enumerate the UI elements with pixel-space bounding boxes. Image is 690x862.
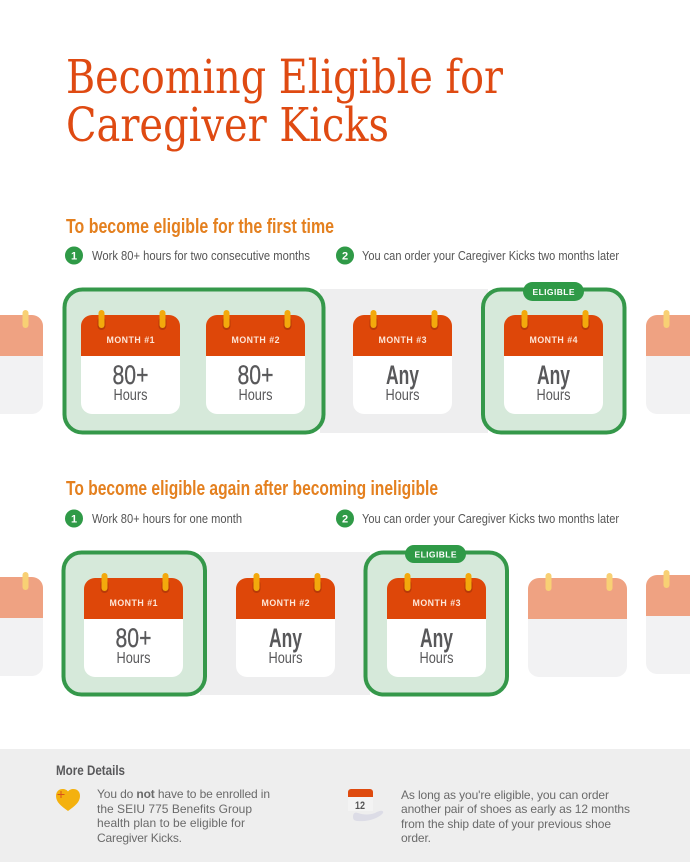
calendar: month 2 xyxy=(206,310,305,414)
step 2: again: 2 xyxy=(342,514,348,526)
calendar: month 2: MONTH #2 xyxy=(232,335,280,345)
calendar: month 2: Hours xyxy=(268,650,303,667)
step 1: again: Work 80+ hours for one month xyxy=(92,511,242,526)
note: reorder timing: another pair of shoes as early as 12 months xyxy=(401,802,630,816)
note: enrollment: You do not have to be enrolled in xyxy=(97,787,270,801)
calendar: month 4: Any xyxy=(537,360,570,390)
note: enrollment: health plan to be eligible for xyxy=(97,816,245,830)
calendar: month 2: Any xyxy=(269,623,302,653)
eligible box: month 4 xyxy=(483,290,624,432)
calendar: month 1: MONTH #1 xyxy=(106,335,155,345)
heading: first time: To become eligible for the first time xyxy=(66,216,334,238)
step 1: again xyxy=(65,510,242,528)
icon: calendar and shoe xyxy=(348,789,383,821)
note: reorder timing: from the ship date of your previous shoe xyxy=(401,817,611,831)
faded calendar left xyxy=(0,310,43,414)
step 2: first time xyxy=(336,246,620,264)
more details heading: More Details xyxy=(56,762,125,778)
calendar: month 3 xyxy=(387,573,486,677)
step 1: again: 1 xyxy=(71,514,77,526)
heading: again: To become eligible again after becoming ineligible xyxy=(66,478,438,500)
note: reorder timing: As long as you're eligible, you can order xyxy=(401,788,609,802)
eligible badge xyxy=(523,282,584,301)
eligible badge: ELIGIBLE xyxy=(414,550,457,560)
note: enrollment: Caregiver Kicks. xyxy=(97,831,182,845)
calendar: month 3: Any xyxy=(420,623,453,653)
eligible box: month 1 xyxy=(64,552,205,694)
step 1: first time xyxy=(65,246,310,264)
faded calendar middle xyxy=(528,573,627,677)
faded calendar left xyxy=(0,572,43,676)
eligible badge xyxy=(405,545,466,563)
calendar: month 3: Any xyxy=(386,360,419,390)
calendar: month 2 xyxy=(236,573,335,677)
calendar: month 3: MONTH #3 xyxy=(412,598,461,608)
step 1: first time: 1 xyxy=(71,250,77,262)
calendar: month 4 xyxy=(504,310,603,414)
step 1: first time: Work 80+ hours for two consecutive months xyxy=(92,248,310,263)
calendar: month 3: MONTH #3 xyxy=(378,335,427,345)
calendar: month 2: Hours xyxy=(238,387,273,404)
calendar: month 2: MONTH #2 xyxy=(262,598,310,608)
eligible badge: ELIGIBLE xyxy=(532,287,575,297)
timeline: again xyxy=(0,545,690,695)
title: Becoming Eligible for xyxy=(66,50,503,105)
step 2: again xyxy=(336,510,620,528)
calendar: month 1: Hours xyxy=(114,387,148,404)
calendar: month 4: Hours xyxy=(536,387,571,404)
note: reorder timing: order. xyxy=(401,831,431,845)
calendar: month 1: MONTH #1 xyxy=(110,598,158,608)
calendar: month 1: 80+ xyxy=(112,360,148,390)
calendar: month 1: 80+ xyxy=(116,623,152,653)
icon: heart xyxy=(56,789,80,811)
step 2: again: You can order your Caregiver Kicks two months later xyxy=(362,511,620,526)
panel: more details xyxy=(0,749,690,862)
calendar: month 2: 80+ xyxy=(238,360,274,390)
note: enrollment: the SEIU 775 Benefits Group xyxy=(97,802,252,816)
step 2: first time: You can order your Caregiver Kicks two months later xyxy=(362,248,620,263)
calendar: month 3: Hours xyxy=(420,650,454,667)
title xyxy=(66,50,503,153)
calendar: month 1: Hours xyxy=(116,650,151,667)
calendar: month 4: MONTH #4 xyxy=(530,335,578,345)
title: Caregiver Kicks xyxy=(66,98,389,153)
faded calendar right xyxy=(646,570,690,674)
timeline: first time xyxy=(0,282,690,433)
faded calendar right xyxy=(646,310,690,414)
calendar: month 1 xyxy=(81,310,180,414)
step 2: first time: 2 xyxy=(342,250,348,262)
icon: calendar and shoe: 12 xyxy=(355,800,365,812)
calendar: month 1 xyxy=(84,573,183,677)
eligible box: months 1 and 2 xyxy=(64,290,324,432)
eligible box: month 3 xyxy=(366,552,507,694)
calendar: month 3: Hours xyxy=(386,387,420,404)
calendar: month 3 xyxy=(353,310,452,414)
